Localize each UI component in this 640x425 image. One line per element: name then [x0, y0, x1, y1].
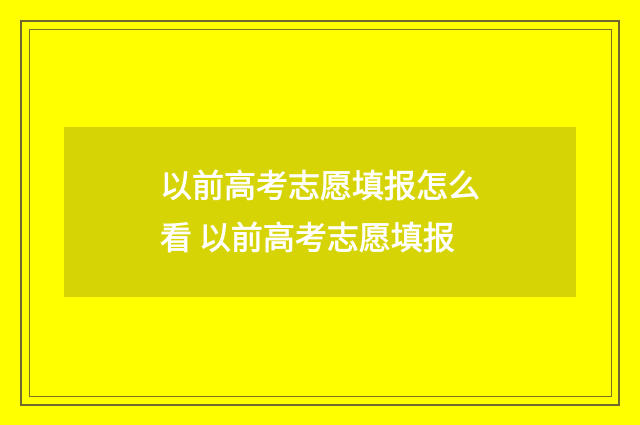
title text [160, 168, 480, 256]
panel: title background [64, 127, 576, 297]
title text: 看 以前高考志愿填报 [160, 220, 455, 256]
inner border frame [29, 29, 612, 397]
title text: 以前高考志愿填报怎么 [160, 168, 480, 204]
